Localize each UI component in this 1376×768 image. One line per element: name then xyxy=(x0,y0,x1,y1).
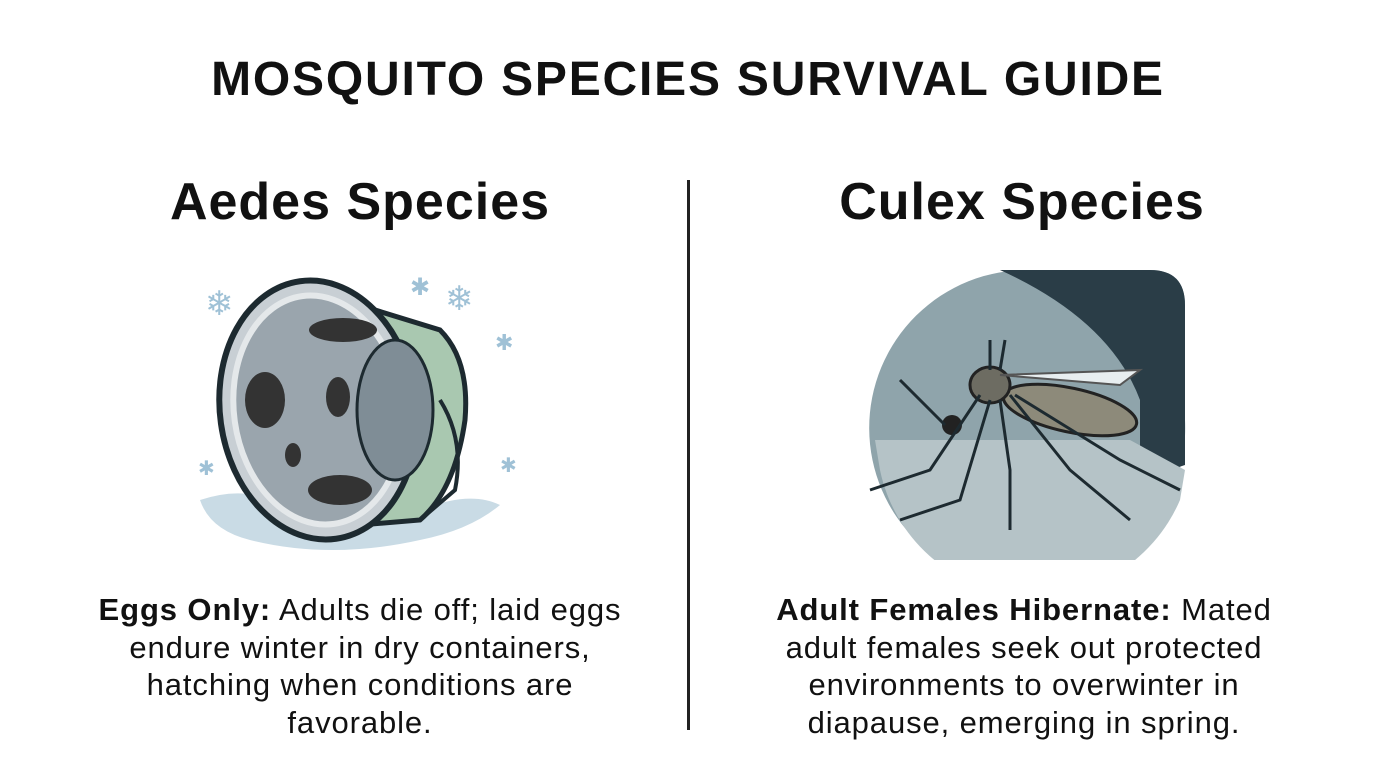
text: culex: adult females seek out protected xyxy=(786,630,1262,664)
heading: culex: Culex Species xyxy=(839,173,1205,231)
text: aedes: Eggs Only: Adults die off; laid eggs xyxy=(99,592,621,627)
illustration: mosquito in shelter xyxy=(869,270,1186,560)
text: culex: environments to overwinter in xyxy=(808,667,1240,702)
illustration: bucket with eggs: ❄ xyxy=(445,280,474,318)
illustration: bucket with eggs: ✱ xyxy=(500,455,517,477)
text: culex: diapause, emerging in spring. xyxy=(808,704,1240,740)
illustration: bucket with eggs: ✱ xyxy=(198,458,215,480)
illustration: bucket with eggs xyxy=(198,274,517,550)
text: aedes: endure winter in dry containers, xyxy=(129,630,591,664)
illustration: bucket with eggs: ❄ xyxy=(205,285,234,323)
text: culex: Adult Females Hibernate: Mated xyxy=(776,592,1272,627)
title: MOSQUITO SPECIES SURVIVAL GUIDE xyxy=(211,53,1165,106)
text: culex xyxy=(776,592,1272,740)
divider xyxy=(687,180,690,730)
text: aedes xyxy=(99,592,621,740)
heading: aedes: Aedes Species xyxy=(170,173,550,231)
text: aedes: hatching when conditions are xyxy=(147,667,573,702)
illustration: bucket with eggs: ✱ xyxy=(410,274,430,301)
illustration: bucket with eggs: ✱ xyxy=(495,330,513,355)
text: aedes: favorable. xyxy=(287,704,433,740)
